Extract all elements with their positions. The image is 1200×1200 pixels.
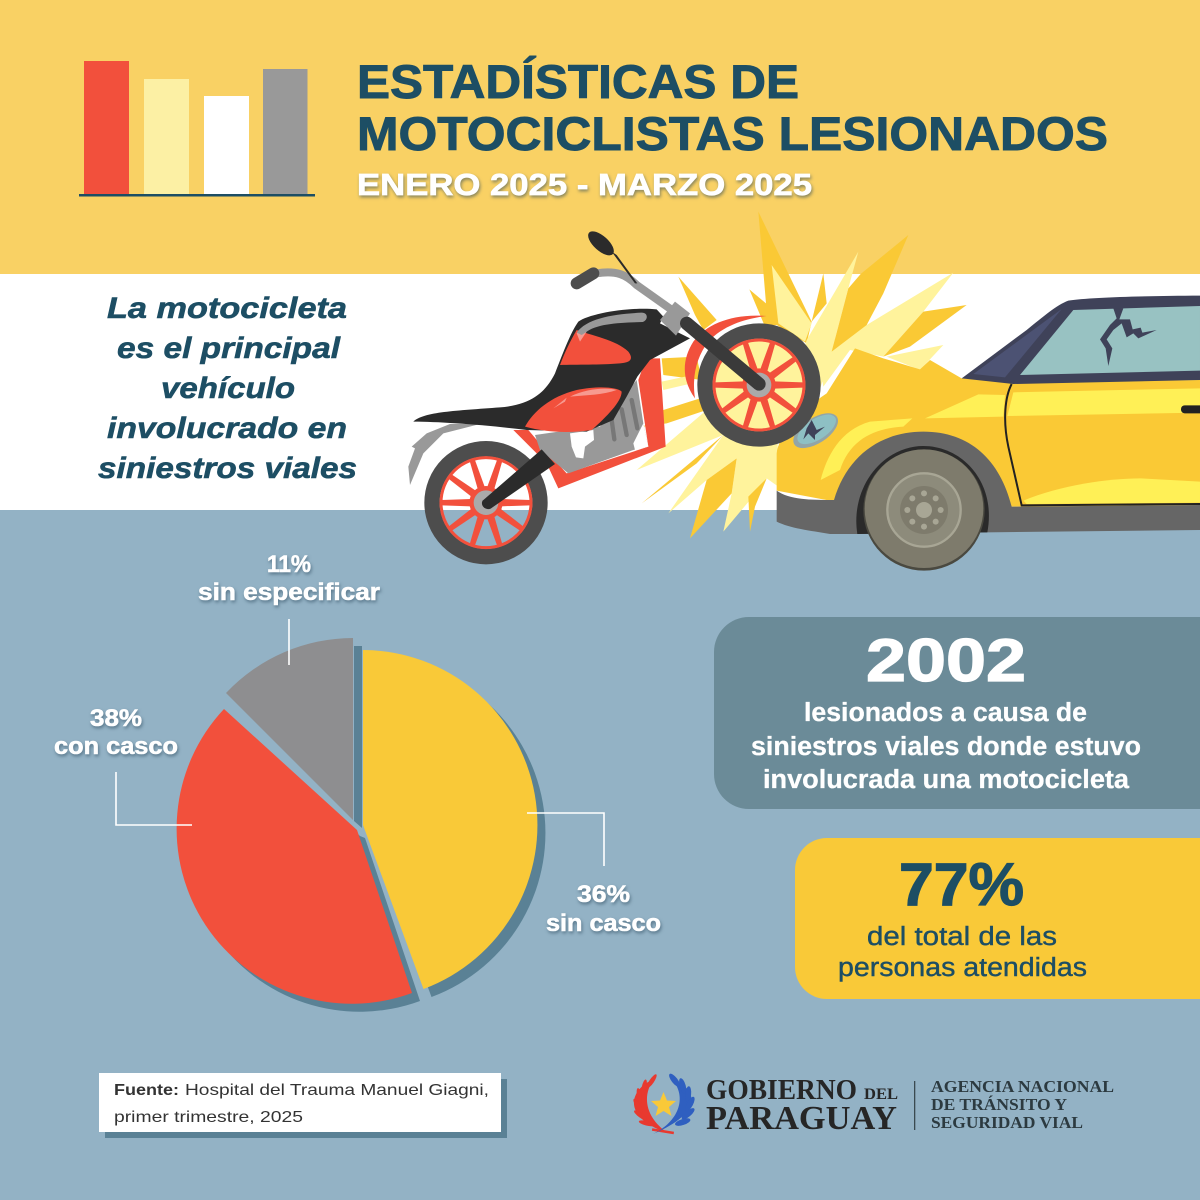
rear fork xyxy=(482,449,555,509)
source note: Fuente: xyxy=(114,1082,179,1099)
label: sin casco: 36% xyxy=(577,881,630,908)
big number 77%: 77% xyxy=(899,851,1024,918)
label: sin especificar: sin especificar xyxy=(198,579,380,606)
door handle xyxy=(1181,405,1200,413)
leader line: sin especificar xyxy=(288,619,290,665)
description: involucrada una motocicleta xyxy=(763,766,1130,794)
description: siniestros viales donde estuvo xyxy=(751,733,1141,761)
logo: government wordmark: PARAGUAY xyxy=(706,1100,897,1137)
slice: con casco 38% xyxy=(177,709,412,1004)
panel: total injured xyxy=(714,617,1200,809)
description: del total de las xyxy=(867,923,1057,951)
logo: government wordmark xyxy=(706,1075,898,1137)
panel: percent of patients xyxy=(795,838,1200,999)
label: con casco: 38% xyxy=(90,705,142,732)
door outline xyxy=(1005,384,1200,505)
logo: agency wordmark: DE TRÁNSITO Y xyxy=(931,1095,1067,1114)
source note: primer trimestre, 2025 xyxy=(114,1109,303,1126)
front wheel xyxy=(705,330,813,440)
engine xyxy=(535,380,648,473)
title: MOTOCICLISTAS LESIONADOS xyxy=(357,107,1108,160)
statement text: siniestros viales xyxy=(98,452,357,485)
middle white band xyxy=(0,274,1200,510)
statement text xyxy=(98,292,357,485)
description xyxy=(838,923,1087,982)
pie chart xyxy=(177,638,545,1012)
rear wheel xyxy=(432,448,540,558)
statement text: La motocicleta xyxy=(107,292,347,325)
subtitle: date range: ENERO 2025 - MARZO 2025 xyxy=(357,167,812,202)
logo divider xyxy=(914,1081,915,1130)
car body xyxy=(777,348,1200,507)
leader line: con casco xyxy=(116,772,192,825)
windshield pillar xyxy=(973,309,1062,377)
statement text: es el principal xyxy=(117,332,341,365)
handlebar clamp xyxy=(660,302,690,336)
bumper and wheel arch xyxy=(777,432,1200,534)
frame xyxy=(513,358,666,488)
logo: agency wordmark: AGENCIA NACIONAL xyxy=(931,1077,1114,1096)
description: lesionados a causa de xyxy=(804,699,1087,727)
illustration: motorcycle xyxy=(408,227,813,558)
label: con casco xyxy=(54,705,178,760)
illustration: explosion xyxy=(637,212,967,538)
grip xyxy=(577,273,593,283)
statement text: vehículo xyxy=(161,372,295,405)
logo: agency wordmark xyxy=(931,1077,1114,1132)
car window glass xyxy=(1020,306,1200,375)
window crack xyxy=(1100,308,1157,366)
label: con casco: con casco xyxy=(54,733,178,760)
slice shadows xyxy=(185,646,545,1012)
headlight xyxy=(788,406,844,455)
header band xyxy=(0,0,1200,274)
label: sin casco: sin casco xyxy=(546,910,661,937)
source note: Hospital del Trauma Manuel Giagni, xyxy=(185,1082,489,1099)
label: sin especificar: 11% xyxy=(267,551,311,578)
mirror xyxy=(584,227,637,283)
title: ESTADÍSTICAS DE xyxy=(357,55,799,108)
car wheel xyxy=(863,449,985,571)
logo: government wordmark: DEL xyxy=(864,1086,898,1103)
logo: government wordmark: GOBIERNO xyxy=(706,1075,857,1106)
big number 2002: 2002 xyxy=(866,627,1026,694)
wheel well xyxy=(856,446,989,534)
leader line: sin casco xyxy=(527,813,604,866)
handlebar xyxy=(597,272,677,313)
front fender xyxy=(685,316,767,398)
front fork xyxy=(687,323,759,384)
tank red panel xyxy=(560,330,631,365)
label: sin casco xyxy=(546,881,661,937)
slice: sin casco 36% xyxy=(363,650,537,989)
car roof and window frame xyxy=(962,296,1200,384)
slice: sin especificar 11% xyxy=(226,638,353,820)
label: sin especificar xyxy=(198,551,380,606)
door highlights xyxy=(821,388,1200,504)
lower blue background xyxy=(0,510,1200,1200)
source note xyxy=(99,1073,507,1138)
icon: bar chart xyxy=(79,61,315,196)
description xyxy=(751,699,1141,794)
logo: government crest xyxy=(632,1072,696,1134)
seat and tank xyxy=(413,309,690,432)
illustration: yellow car xyxy=(777,296,1200,571)
panel highlights xyxy=(553,331,617,408)
description: personas atendidas xyxy=(838,954,1087,982)
logo: agency wordmark: SEGURIDAD VIAL xyxy=(931,1113,1083,1132)
tank shine xyxy=(577,313,647,335)
title xyxy=(357,55,1108,160)
statement text: involucrado en xyxy=(107,412,347,445)
lower red panel xyxy=(525,387,622,432)
rear fender xyxy=(408,424,480,485)
